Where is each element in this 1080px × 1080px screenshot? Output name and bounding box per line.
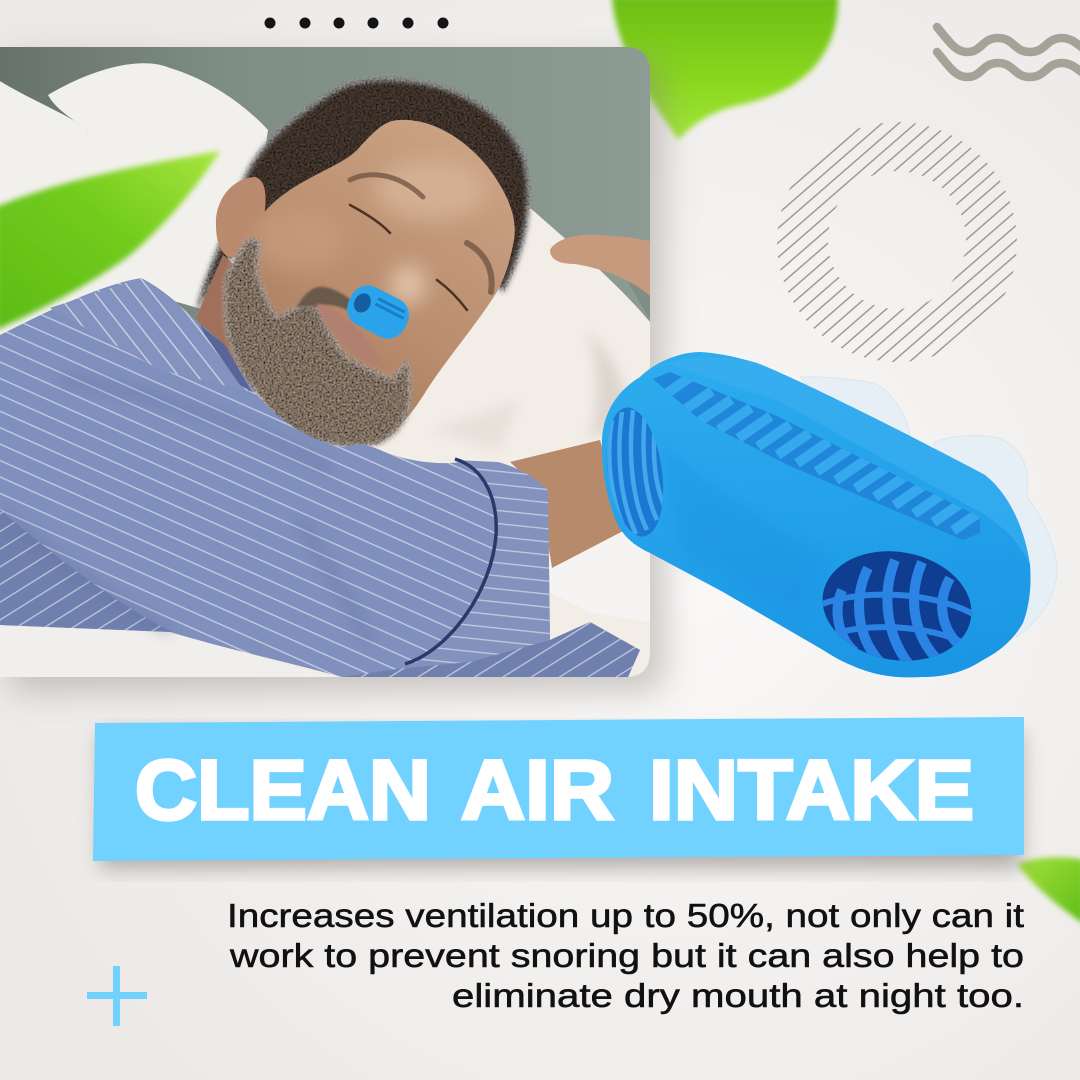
clear silicone tips xyxy=(800,377,1057,637)
photo base xyxy=(0,375,650,677)
mustache xyxy=(297,287,356,312)
pillow folds xyxy=(448,338,626,445)
title: INTAKE xyxy=(649,743,974,837)
top grille xyxy=(653,372,980,540)
cuff seam xyxy=(405,459,496,664)
description text: Increases ventilation up to 50%, not only can it xyxy=(227,897,1024,934)
right vent xyxy=(822,551,972,661)
small device on nose xyxy=(347,285,409,339)
bed sheet xyxy=(0,627,342,680)
eyes and brows xyxy=(350,175,492,310)
hatched ring xyxy=(777,122,1017,362)
description text xyxy=(227,897,1024,1014)
shoulder xyxy=(50,278,253,392)
shirt xyxy=(0,278,640,677)
body below arm xyxy=(0,510,172,632)
title: CLEAN xyxy=(135,743,431,837)
ear xyxy=(216,177,266,257)
right pillow xyxy=(462,206,650,340)
photo: sleeping man xyxy=(0,47,650,680)
description text: work to prevent snoring but it can also help to xyxy=(229,937,1024,974)
beard xyxy=(224,240,410,446)
leaf: right xyxy=(1017,857,1080,924)
shirt main xyxy=(0,278,640,677)
top rim highlight xyxy=(640,357,1030,565)
leaf: left xyxy=(0,151,220,330)
title banner xyxy=(93,717,1024,868)
pagination dots xyxy=(264,18,448,28)
lower pillow xyxy=(549,532,650,622)
hair xyxy=(196,79,529,314)
cuff xyxy=(405,460,550,668)
icon: wavy lines xyxy=(937,27,1080,77)
hand xyxy=(550,235,650,296)
fold shadows xyxy=(0,380,370,640)
description text: eliminate dry mouth at night too. xyxy=(452,977,1024,1014)
wall xyxy=(0,47,650,347)
mouth xyxy=(316,302,380,364)
photo shadow xyxy=(10,60,665,692)
skin highlights xyxy=(255,160,485,305)
lower shirt xyxy=(342,622,640,677)
face xyxy=(226,120,515,446)
wall strip beside hand xyxy=(628,282,650,320)
shaded lower band xyxy=(660,440,830,620)
collar xyxy=(200,325,252,392)
forearm xyxy=(510,440,625,568)
left vent xyxy=(606,408,664,536)
neck xyxy=(196,255,256,392)
left pillows xyxy=(0,63,268,340)
icon: plus xyxy=(87,966,147,1026)
leaf: top xyxy=(612,0,838,140)
body xyxy=(602,352,1031,677)
device: anti-snoring nose clip xyxy=(600,352,1057,677)
title: AIR xyxy=(461,743,614,837)
